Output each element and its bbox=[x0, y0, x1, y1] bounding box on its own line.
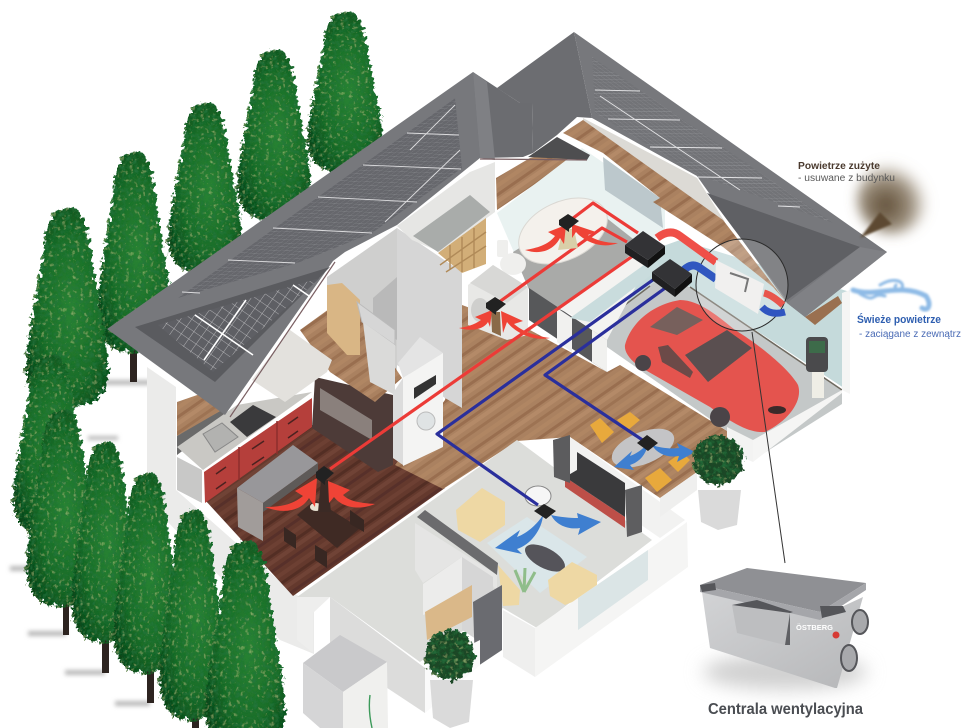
upper solar panels bbox=[178, 98, 462, 298]
lower left cabinet bbox=[177, 457, 202, 503]
text: used air: - usuwane z budynku bbox=[798, 173, 895, 184]
armchairs bbox=[456, 488, 597, 606]
plant terrace bbox=[693, 435, 743, 530]
white boiler unit bbox=[393, 337, 443, 466]
living room floor bbox=[297, 440, 652, 662]
EV charger bbox=[806, 337, 828, 398]
duct junction box blue bbox=[652, 259, 692, 297]
inspection circle bbox=[696, 239, 788, 331]
outdoor heat pump box bbox=[303, 635, 388, 728]
unit shadow bbox=[703, 654, 867, 690]
text: used air bbox=[798, 160, 895, 184]
robot vacuum bbox=[525, 486, 551, 506]
washer bbox=[468, 265, 528, 340]
kitchen dark wood floor bbox=[205, 425, 445, 596]
callout line to unit bbox=[752, 332, 785, 563]
right roof bbox=[574, 32, 887, 317]
exterior left wall bbox=[147, 367, 314, 654]
large blue duct bbox=[684, 265, 716, 279]
terrace wall bbox=[660, 472, 697, 517]
blue ducts bbox=[437, 277, 668, 505]
text: used air: Powietrze zużyte bbox=[798, 160, 880, 172]
roof valley gable bbox=[473, 72, 590, 160]
garage car bbox=[625, 300, 799, 432]
terrace dining set bbox=[590, 412, 690, 492]
wooden shelf bbox=[438, 218, 486, 273]
interior and exterior front walls bbox=[297, 290, 850, 713]
island bbox=[237, 445, 318, 541]
upper wood floor behind bathroom bbox=[496, 150, 585, 210]
front row of trees bbox=[13, 355, 285, 728]
wardrobe bbox=[327, 283, 360, 355]
right solar panels bbox=[592, 57, 833, 223]
ventilation unit in the attic bbox=[715, 260, 785, 314]
plant entrance bbox=[425, 630, 475, 728]
back row of trees bbox=[26, 12, 383, 408]
large red duct bbox=[657, 232, 716, 262]
unit caption: Centrala wentylacyjna bbox=[708, 701, 863, 718]
text: fresh air bbox=[857, 313, 961, 340]
indoor plant bbox=[515, 568, 535, 592]
text: fresh air: - zaciągane z zewnątrz bbox=[859, 329, 961, 340]
side wood bbox=[177, 393, 222, 436]
kitchen bbox=[177, 283, 402, 568]
ventilation unit product image bbox=[700, 568, 868, 690]
dining table bbox=[284, 500, 364, 568]
brand logo: ÖSTBERG bbox=[796, 623, 834, 632]
partition with grey top bbox=[415, 510, 498, 650]
bathroom bbox=[497, 148, 665, 313]
central light wood floor bbox=[395, 305, 732, 498]
bathtub bbox=[508, 185, 618, 277]
TV wall bbox=[570, 437, 685, 538]
main left roof bbox=[107, 72, 480, 417]
toilet bbox=[497, 240, 526, 275]
stove bbox=[230, 405, 276, 437]
counter top bbox=[177, 392, 312, 470]
rug and coffee table bbox=[487, 517, 587, 593]
eave under right roof bbox=[563, 118, 787, 303]
unit body bbox=[702, 592, 863, 688]
duct junction box red bbox=[625, 231, 665, 268]
unit corners bbox=[700, 583, 846, 618]
right roof gable bbox=[497, 32, 592, 153]
dark roof triangle bbox=[707, 193, 860, 300]
partition bathroom garage bbox=[529, 252, 660, 372]
unit ports bbox=[841, 610, 868, 671]
unit top bbox=[700, 568, 866, 612]
air conditioner bbox=[357, 302, 395, 345]
text: fresh air: Świeże powietrze bbox=[857, 313, 941, 326]
TV set bbox=[553, 435, 642, 537]
garage floor and walls bbox=[570, 240, 850, 460]
front door bbox=[473, 585, 502, 668]
exhaust smoke bbox=[857, 162, 929, 238]
bookshelf bbox=[425, 585, 472, 640]
wood eave at garage bbox=[805, 296, 842, 325]
red supply ducts bbox=[330, 203, 638, 469]
granite counter bbox=[413, 195, 490, 252]
tree ground shadows bbox=[10, 380, 150, 706]
air vent bathroom with red arrows bbox=[525, 214, 618, 252]
air vent living room with blue arrows bbox=[495, 504, 601, 554]
fresh air swirl bbox=[853, 280, 929, 309]
interior walls bbox=[327, 162, 528, 408]
air vent washer with red arrows bbox=[459, 297, 550, 339]
upper wood shelf bbox=[300, 296, 402, 402]
red cabinets bbox=[204, 398, 312, 503]
lower solar panels bbox=[158, 278, 320, 372]
brand logo bbox=[796, 623, 840, 638]
sink bbox=[203, 423, 238, 452]
house cutaway bbox=[107, 32, 887, 713]
unit flap bbox=[732, 605, 790, 645]
air vent terrace with blue arrows bbox=[614, 435, 695, 470]
air vent kitchen with red arrows bbox=[265, 466, 375, 512]
back cabinets bbox=[312, 377, 393, 472]
cooker hood bbox=[252, 330, 332, 402]
